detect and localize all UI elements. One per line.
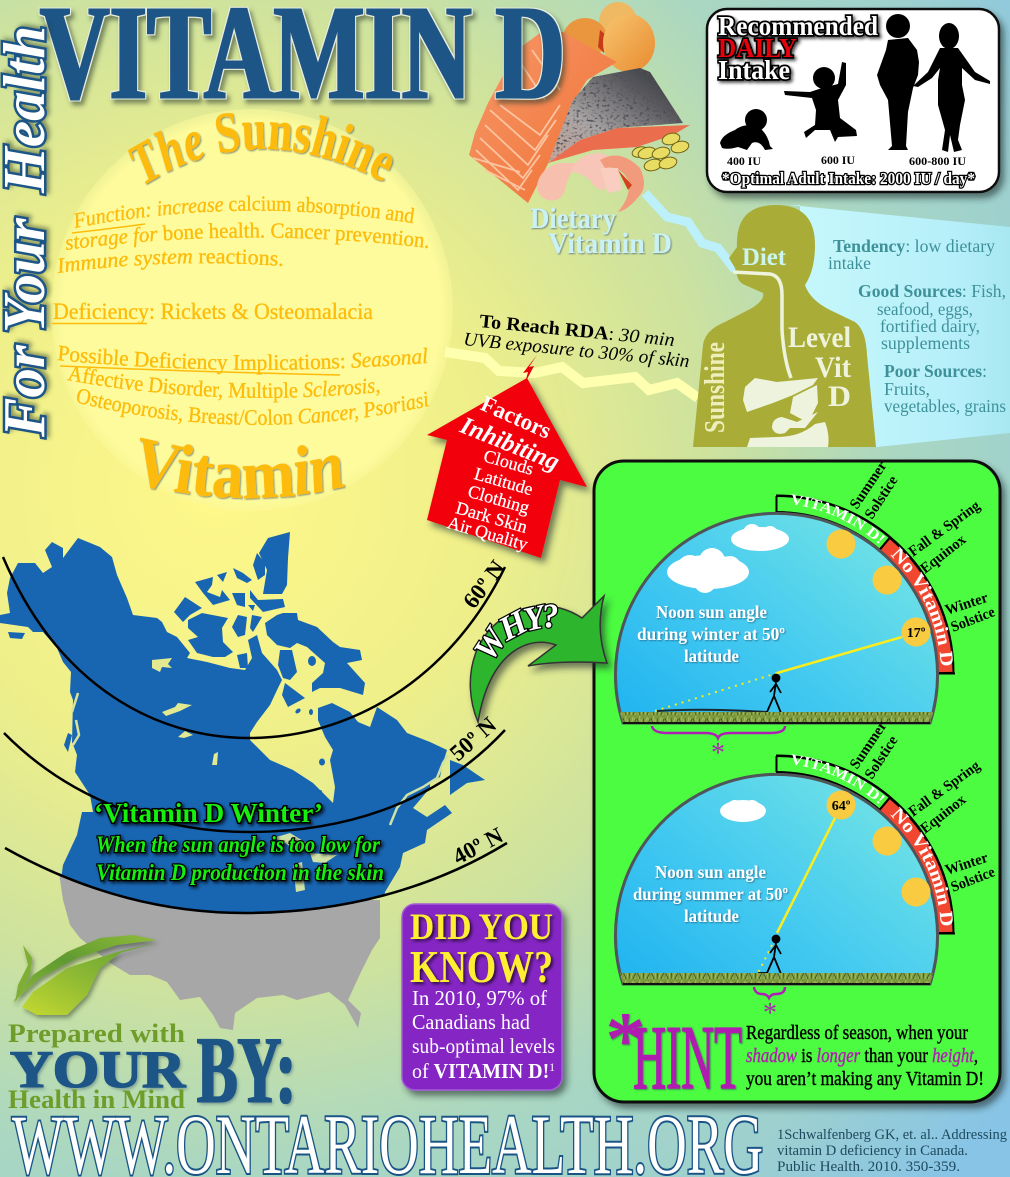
heading: did you know (410, 907, 553, 992)
text: dietary sources: Fruits, (884, 379, 930, 399)
star: * (711, 738, 725, 769)
list: inhibiting factors: Latitude (472, 463, 535, 499)
text: vitamin D winter description: When the sun angle is too low for (96, 832, 381, 857)
text: noon sun angle winter (637, 602, 785, 666)
text: function: Immune system reactions. (58, 250, 282, 274)
citation: Public Health. 2010. 350-359. (777, 1159, 960, 1175)
diagram: summer sun angle (614, 718, 998, 1029)
latitude line: 50 N (4, 730, 505, 832)
band: vitamin D arc (776, 756, 884, 803)
list: inhibiting factors: Clouds (481, 446, 536, 479)
text: to reach RDA: To Reach RDA : 30 min (479, 311, 676, 351)
diagram: winter sun angle (614, 458, 998, 769)
text: dietary sources: supplements (881, 333, 970, 353)
shadow (657, 710, 767, 712)
text: did you know fact (412, 986, 555, 1083)
text: function (58, 196, 428, 274)
label: Diet: Diet (742, 244, 787, 271)
text: did you know fact: 1 (549, 1060, 555, 1074)
heading: recommended daily intake: Recommended (718, 11, 878, 41)
icon: woman silhouette (913, 23, 990, 152)
label: No Vitamin D: No Vitamin D (890, 806, 953, 926)
text: dietary sources: vegetables, grains (884, 396, 1006, 416)
label: Level Vit D: Vit (815, 351, 851, 384)
band: no vitamin D arc (884, 803, 955, 934)
text: noon sun angle summer: latitude (684, 906, 739, 926)
text: dietary sources: intake (828, 253, 871, 273)
text: noon sun angle winter: Noon sun angle (656, 602, 767, 622)
text: possible deficiency implications: Affective Disorder, Multiple Sclerosis, (67, 367, 380, 403)
icon: man silhouette (877, 14, 919, 150)
labels: IU amounts: 600-800 IU (909, 154, 966, 168)
label: 60 N: 60º N (458, 555, 510, 613)
label: Sunshine: Sunshine (700, 342, 731, 433)
labels: season markers: Solstice (862, 473, 902, 522)
icon: eggs (563, 2, 655, 72)
text: noon sun angle summer: during summer at 50º (633, 884, 788, 904)
labels: season markers: Winter (943, 590, 990, 619)
label: 40 N: 40º N (449, 822, 507, 869)
heading: Vitamin: Vitamin (140, 438, 346, 501)
icon: clouds (667, 524, 789, 593)
text: did you know fact: of VITAMIN D! (412, 1059, 555, 1083)
heading: did you know: KNOW? (410, 941, 553, 992)
text: vitamin D winter description: Vitamin D production in the skin (96, 860, 384, 885)
label: 64 degrees: 64º (832, 799, 851, 814)
map of North America (0, 532, 510, 1030)
labels: season markers: Summer (847, 718, 891, 772)
map: lakes (152, 658, 218, 765)
map: United States (59, 873, 380, 1030)
cyan information panel (790, 205, 1010, 447)
labels: season markers: Fall & Spring (906, 758, 984, 820)
list: inhibiting factors (445, 446, 536, 554)
labels: season markers: Equinox (918, 792, 970, 837)
labels: IU amounts: 600 IU (821, 153, 855, 167)
icon: cloud (720, 800, 766, 822)
heading: The Sunshine: The Sunshine (128, 113, 394, 186)
heading: HINT: HINT (633, 1007, 742, 1108)
label: No Vitamin D: No Vitamin D (890, 546, 953, 666)
heading: BY: BY: (197, 1017, 296, 1123)
labels: season markers: Fall & Spring (906, 498, 984, 560)
label: VITAMIN D!: VITAMIN D! (792, 494, 885, 544)
label: VITAMIN D!: VITAMIN D! (792, 754, 885, 804)
text: noon sun angle winter: latitude (684, 646, 739, 666)
label: 50 N: 50º N (445, 712, 502, 766)
shadow bracket (652, 726, 785, 738)
latitude line: 60 N (3, 557, 505, 738)
label: 17 degrees: 17º (907, 626, 926, 641)
text: noon sun angle summer (633, 862, 788, 926)
citation: vitamin D deficiency in Canada. (777, 1143, 968, 1159)
text: hint message (746, 1022, 984, 1090)
panel: sunshine vitamin text (52, 113, 429, 501)
heading: HINT (606, 996, 742, 1108)
text: hint message: shadow is longer than your height, (746, 1045, 978, 1067)
sunshine zigzag ray (445, 352, 698, 398)
panel: did you know (402, 904, 562, 1090)
text: did you know fact: Canadians had (412, 1010, 530, 1034)
text: did you know fact: sub-optimal levels (412, 1034, 555, 1058)
text: vitamin D winter description (96, 832, 384, 885)
heading: factors inhibiting: Inhibiting (456, 412, 563, 476)
text: to reach RDA (463, 311, 690, 372)
text: dietary sources: Good Sources: Fish, (858, 281, 1006, 301)
dietary zigzag arrow (645, 193, 735, 270)
text: function: Function: increase calcium absorption and (74, 196, 414, 228)
citation: 1Schwalfenberg GK, et. al.. Addressing (777, 1127, 1007, 1143)
icon: salmon fillet (469, 32, 617, 203)
text: did you know fact: In 2010, 97% of (412, 986, 547, 1010)
text: deficiency: Deficiency: Rickets & Osteomalacia (53, 299, 373, 324)
text: dietary sources: seafood, eggs, (877, 299, 973, 319)
labels: season markers: Winter (943, 850, 990, 879)
arrow: why (468, 594, 614, 730)
citation (777, 1127, 1007, 1175)
heading: factors inhibiting: Factors (477, 391, 555, 444)
heading: Dietary Vitamin D (530, 202, 672, 260)
sun ray (758, 818, 835, 973)
text: possible deficiency implications: Possible Deficiency Implications: Seasonal (58, 346, 428, 375)
hint (606, 996, 984, 1108)
latitude line: 40 N (5, 843, 507, 913)
text: dietary sources (828, 236, 1006, 416)
labels: IU amounts (727, 153, 966, 168)
sky dome (616, 513, 938, 723)
text: prepared with your health in mind: Health in Mind (8, 1085, 186, 1114)
label: Level Vit D: D (828, 380, 851, 413)
labels: season markers (847, 718, 998, 896)
heading: recommended daily intake: DAILY (718, 33, 797, 63)
heading: recommended daily intake (718, 11, 878, 85)
list: inhibiting factors: Dark Skin (454, 497, 530, 537)
icon: salmon skin (548, 68, 690, 163)
band: vitamin D arc (776, 496, 884, 543)
text: prepared with your health in mind: Prepared with (8, 1019, 186, 1048)
labels: season markers: Solstice (949, 604, 998, 636)
labels: season markers: Equinox (918, 532, 970, 577)
label: Level Vit D (788, 321, 851, 413)
arrow: factors inhibiting (427, 355, 587, 558)
icon: child silhouette (784, 62, 857, 142)
list: inhibiting factors: Air Quality (445, 512, 530, 554)
text: to reach RDA: UVB exposure to 30% of skin (463, 329, 690, 372)
heading: HINT: * (606, 996, 645, 1083)
labels: season markers (847, 458, 998, 636)
text: prepared with your health in mind: YOUR (10, 1041, 186, 1099)
text: dietary sources: fortified dairy, (880, 316, 980, 336)
shadow bracket (754, 987, 785, 998)
text: hint message: Regardless of season, when your (746, 1022, 968, 1044)
text: noon sun angle winter: during winter at 50º (637, 624, 785, 644)
icon: supplement pills (631, 131, 690, 173)
logo: leaf (12, 935, 157, 1015)
heading: did you know: DID YOU (410, 907, 553, 948)
map: Canada and Alaska (0, 532, 485, 925)
labels: season markers: Summer (847, 458, 891, 512)
label: WHY?: WHY? (472, 602, 558, 659)
list: inhibiting factors: Clothing (466, 481, 532, 518)
text: dietary sources: Tendency: low dietary (833, 236, 995, 256)
food illustration (469, 2, 690, 212)
label: Level Vit D: Level (788, 321, 851, 354)
heading: vitamin D winter: ‘Vitamin D Winter’ (94, 798, 323, 828)
star: * (763, 998, 777, 1029)
sun ray (655, 637, 902, 711)
icon: person (767, 674, 781, 713)
labels: season markers: Solstice (862, 733, 902, 782)
labels: IU amounts: 400 IU (727, 154, 761, 168)
text: noon sun angle summer: Noon sun angle (655, 862, 766, 882)
icon: baby silhouette (720, 109, 773, 150)
heading: Dietary Vitamin D: Dietary (530, 202, 616, 235)
panel: recommended daily intake (707, 9, 999, 192)
text: function: storage for bone health. Cancer prevention. (66, 222, 428, 250)
heading: recommended daily intake: Intake (718, 55, 790, 85)
icon: suns (826, 530, 930, 646)
sky dome (616, 774, 938, 984)
text: possible deficiency implications (58, 346, 429, 426)
body silhouette (693, 205, 876, 447)
grass (620, 973, 933, 984)
panel: sun angle explanation (592, 458, 1010, 1114)
icon: suns (826, 790, 930, 906)
digestive tract (733, 272, 829, 447)
icon: shrimp (537, 153, 644, 212)
text: dietary sources: Poor Sources: (884, 361, 987, 381)
sun circle (51, 109, 453, 511)
grass (620, 712, 933, 723)
text: prepared with your health in mind (8, 1019, 186, 1114)
labels: season markers: Solstice (949, 864, 998, 896)
icon: person (758, 936, 781, 974)
heading: Dietary Vitamin D: Vitamin D (548, 227, 672, 260)
text: optimal adult intake: *Optimal Adult Intake: 2000 IU / day* (722, 169, 975, 188)
band: no vitamin D arc (884, 543, 955, 674)
